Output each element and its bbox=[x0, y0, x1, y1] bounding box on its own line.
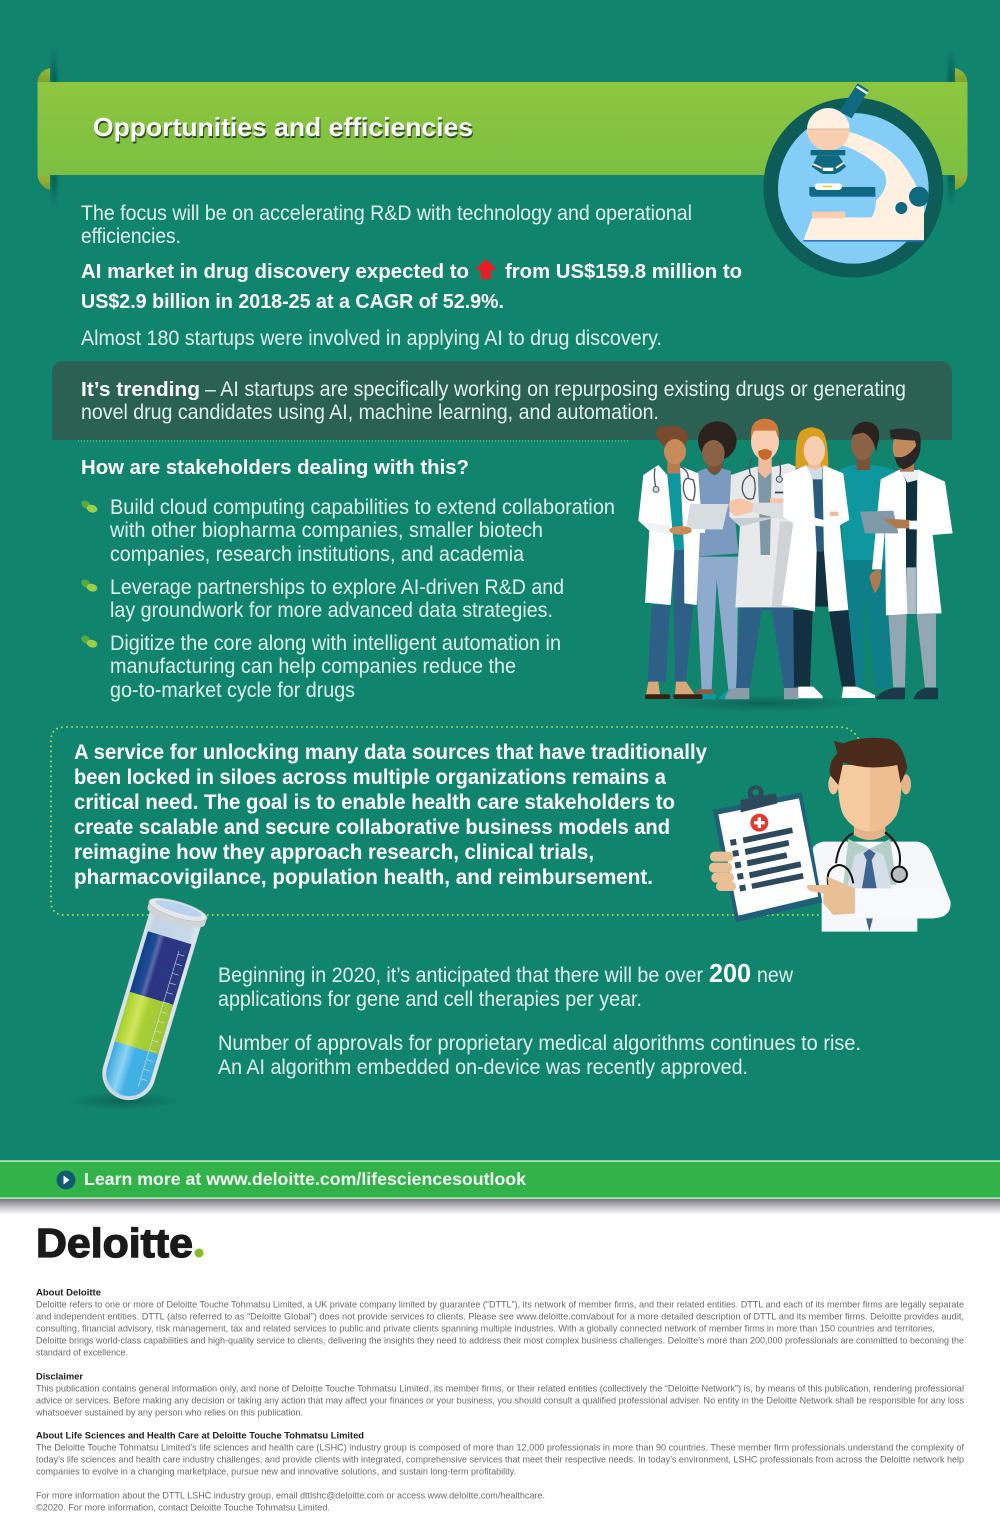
icon: up arrow bbox=[475, 259, 497, 279]
therapy statistics text: Number of approvals for proprietary medical algorithms continues to rise. bbox=[218, 1032, 861, 1055]
callout: dotted box: reimagine how they approach research, clinical trials, bbox=[74, 841, 594, 864]
person: man with arms crossed bbox=[725, 419, 799, 699]
about Deloitte: Deloitte brings world-class capabilities and high-quality service to clients, delivering the insights they need to address their most complex business challenges. Deloitte’s more than 200,000 professionals are committed to becoming the bbox=[36, 1334, 964, 1346]
about Deloitte: consulting, financial advisory, risk management, tax and related services to public and private clients spanning multiple industries. With a globally connected network of member firms in more than 150 countries and territories, bbox=[36, 1322, 935, 1334]
illustration: team of health workers bbox=[638, 419, 953, 712]
ribbon banner bbox=[38, 46, 968, 209]
panel: it's trending: It’s trending bbox=[81, 378, 200, 401]
about Deloitte: standard of excellence. bbox=[36, 1346, 128, 1358]
about life sciences: About Life Sciences and Health Care at Deloitte Touche Tohmatsu Limited bbox=[36, 1430, 364, 1440]
panel: it's trending bbox=[52, 361, 952, 440]
illustration: test tube bbox=[67, 894, 209, 1110]
intro text bbox=[81, 202, 692, 248]
about Deloitte: and independent entities. DTTL (also referred to as “Deloitte Global”) does not provide services to clients. Please see www.deloitte.com/about for a more detailed description of DTTL and its member firms. Deloitte provides audit, bbox=[36, 1310, 964, 1322]
about life sciences bbox=[36, 1430, 964, 1476]
icon: microscope bbox=[763, 83, 943, 278]
call to action bar: Learn more at www.deloitte.com/lifesciencesoutlook bbox=[84, 1169, 526, 1189]
person: woman with tablet bbox=[638, 426, 728, 699]
therapy statistics text: applications for gene and cell therapies per year. bbox=[218, 988, 642, 1011]
callout: dotted box bbox=[51, 727, 858, 915]
bullet 1: companies, research institutions, and academia bbox=[110, 543, 524, 566]
about Deloitte bbox=[36, 1286, 964, 1358]
intro text: The focus will be on accelerating R&D with technology and operational bbox=[81, 202, 692, 225]
disclaimer: Disclaimer bbox=[36, 1370, 83, 1382]
bullet 3: manufacturing can help companies reduce the bbox=[110, 655, 516, 678]
bullet 1: Build cloud computing capabilities to extend collaboration bbox=[110, 496, 615, 519]
title: Opportunities and efficiencies bbox=[93, 112, 473, 142]
panel: it's trending: – AI startups are specifically working on repurposing existing drugs or generating bbox=[205, 378, 906, 401]
disclaimer: advice or services. Before making any decision or taking any action that may affect your finances or your business, you should consult a qualified professional adviser. No entity in the Deloitte Network shall be responsible for any loss bbox=[36, 1394, 964, 1406]
illustration: doctor with clipboard bbox=[709, 738, 951, 932]
heading: stakeholders: How are stakeholders dealing with this? bbox=[81, 456, 469, 479]
callout: dotted box: A service for unlocking many data sources that have traditionally bbox=[74, 741, 707, 764]
bullet list bbox=[80, 496, 615, 702]
therapy statistics text: new bbox=[757, 964, 794, 987]
key stat bbox=[81, 259, 742, 313]
key stat: US$2.9 billion in 2018-25 at a CAGR of 52.9%. bbox=[81, 290, 504, 313]
about Deloitte: About Deloitte bbox=[36, 1286, 101, 1298]
person: bearded man with tablet bbox=[860, 428, 953, 699]
clipboard bbox=[713, 785, 822, 922]
icon: play button bbox=[56, 1170, 76, 1190]
logo: Deloitte: Deloitte bbox=[36, 1220, 193, 1266]
person: blue scrubs bbox=[695, 421, 738, 699]
contact and copyright: ©2020. For more information, contact Deloitte Touche Tohmatsu Limited. bbox=[36, 1502, 330, 1512]
therapy statistics text: Beginning in 2020, it’s anticipated that there will be over bbox=[218, 964, 703, 987]
disclaimer bbox=[35, 1370, 964, 1418]
therapy statistics text: 200 bbox=[709, 958, 751, 988]
about life sciences: The Deloitte Touche Tohmatsu Limited’s life sciences and health care (LSHC) industry group is composed of more than 12,000 professionals in more than 90 countries. These member firm professionals understand the complexity of bbox=[36, 1442, 964, 1452]
call to action bar bbox=[0, 1160, 1000, 1199]
contact and copyright: For more information about the DTTL LSHC industry group, email dttlshc@deloitte.com or access www.deloitte.com/healthcare. bbox=[36, 1490, 545, 1500]
about life sciences: companies to evolve in a changing marketplace, pursue new and innovative solutions, and sustain long-term profitability. bbox=[36, 1466, 516, 1476]
disclaimer: This publication contains general information only, and none of Deloitte Touche Tohmatsu Limited, its member firms, or their related entities (collectively the “Deloitte Network”) is, by means of this publication, rendering professional bbox=[36, 1382, 964, 1394]
about Deloitte: Deloitte refers to one or more of Deloitte Touche Tohmatsu Limited, a UK private company limited by guarantee (“DTTL”), its network of member firms, and their related entities. DTTL and each of its member firms are legally separate bbox=[36, 1298, 964, 1310]
key stat: AI market in drug discovery expected to bbox=[81, 260, 469, 283]
bullet 1: with other biopharma companies, smaller biotech bbox=[109, 519, 543, 542]
key stat: from US$159.8 million to bbox=[505, 260, 742, 283]
callout: dotted box: critical need. The goal is to enable health care stakeholders to bbox=[74, 791, 675, 814]
callout: dotted box: pharmacovigilance, population health, and reimbursement. bbox=[74, 866, 653, 889]
bullet 2: lay groundwork for more advanced data strategies. bbox=[110, 599, 553, 622]
bullet 2: Leverage partnerships to explore AI-driven R&D and bbox=[110, 576, 564, 599]
intro text: efficiencies. bbox=[81, 225, 181, 248]
bullet 3: go-to-market cycle for drugs bbox=[110, 679, 355, 702]
contact and copyright bbox=[36, 1490, 545, 1512]
bullet 3: Digitize the core along with intelligent automation in bbox=[110, 632, 561, 655]
therapy statistics text: An AI algorithm embedded on-device was recently approved. bbox=[218, 1056, 748, 1079]
background bbox=[0, 0, 1000, 1200]
person: teal scrubs bbox=[840, 422, 898, 690]
bullet 1 bbox=[80, 496, 615, 566]
person: blonde woman bbox=[782, 427, 875, 698]
startups text: Almost 180 startups were involved in applying AI to drug discovery. bbox=[81, 327, 662, 350]
doctor body bbox=[813, 738, 951, 932]
callout: dotted box: been locked in siloes across multiple organizations remains a bbox=[74, 766, 666, 789]
hands bbox=[709, 852, 855, 915]
bullet 3 bbox=[80, 632, 561, 702]
about life sciences: today’s life sciences and health care industry challenges, and provide clients with integrated, comprehensive services that meet their respective needs. In today’s environment, LSHC professionals from across the Deloitte network help bbox=[36, 1454, 964, 1464]
panel: it's trending: novel drug candidates using AI, machine learning, and automation. bbox=[81, 401, 659, 424]
bullet 2 bbox=[80, 576, 564, 622]
callout: dotted box: create scalable and secure collaborative business models and bbox=[74, 816, 670, 839]
disclaimer: whatsoever sustained by any person who relies on this publication. bbox=[35, 1406, 303, 1418]
therapy statistics text bbox=[218, 958, 861, 1079]
